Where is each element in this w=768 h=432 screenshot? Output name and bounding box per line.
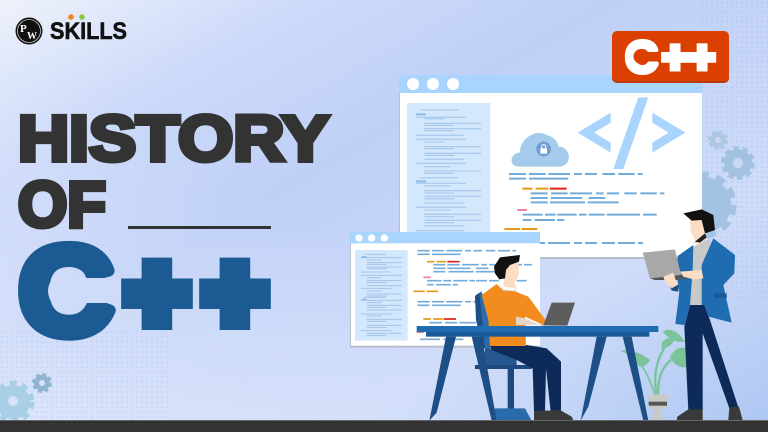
badge: C++: C: [626, 33, 658, 82]
heading: C++: +: [204, 235, 266, 352]
seated man: [482, 255, 575, 420]
badge: C++: [612, 31, 729, 83]
icon: gears right: [675, 132, 752, 233]
footer bar: [0, 420, 768, 432]
icon: gears bottom left: [0, 375, 50, 419]
logo: PW Skills: P: [20, 23, 27, 35]
panel: small code window: [350, 232, 540, 348]
desk: [417, 326, 658, 421]
standing man: [643, 209, 743, 420]
code lines: [504, 174, 664, 229]
plant: [619, 330, 687, 419]
heading: C++: C: [19, 222, 113, 360]
desk rear leg and chair: [475, 291, 532, 421]
logo: PW Skills: [16, 14, 127, 45]
logo: PW Skills: SKILLS: [50, 18, 127, 45]
badge: C++: +: [662, 33, 688, 82]
panel: large code window: [399, 75, 702, 259]
icon: cloud with lock: [512, 133, 569, 167]
heading: C++: +: [126, 235, 188, 352]
heading: C++: [19, 222, 266, 360]
heading: HISTORY OF: [18, 102, 329, 240]
badge: C++: +: [689, 33, 715, 82]
heading: HISTORY OF: HISTORY: [18, 102, 329, 174]
heading: HISTORY OF: OF: [18, 168, 106, 240]
logo: PW Skills: W: [27, 31, 37, 42]
icon: code brackets: [578, 97, 685, 169]
